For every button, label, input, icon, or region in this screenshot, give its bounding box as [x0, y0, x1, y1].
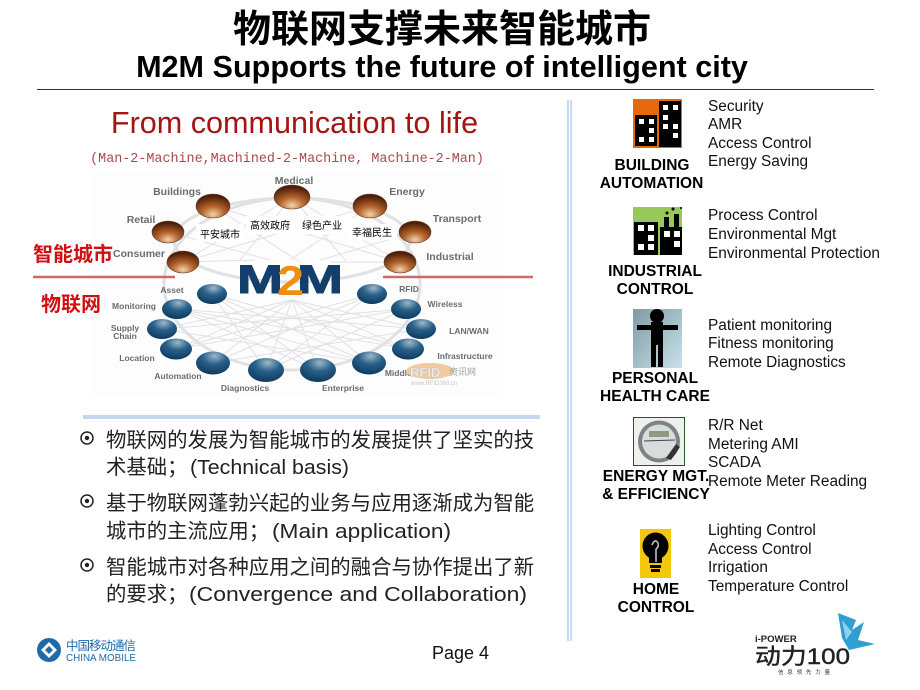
divider: smart city and IoT layers [33, 276, 533, 278]
bullet list [81, 429, 534, 606]
watermark: www.RFID360.cn [410, 381, 457, 387]
M2M logo: M [297, 258, 343, 302]
icon: person [633, 309, 682, 368]
panel: personal health care [600, 309, 846, 405]
bullet 1 [81, 429, 534, 479]
label: internet of things: 物联网 [41, 293, 101, 316]
panel: energy management and efficiency [602, 417, 867, 503]
bullet 1: 物联网的发展为智能城市的发展提供了坚实的技 [106, 429, 534, 452]
icon: light bulb [640, 529, 671, 578]
bullet 2: 城市的主流应用； [106, 521, 269, 543]
panel: building automation: Security [708, 98, 764, 115]
panel: home control: Access Control [708, 541, 812, 558]
panel: home control: Irrigation [708, 559, 768, 576]
panel: energy management and efficiency: & EFFICIENCY [602, 486, 710, 503]
node labels: Retail [127, 214, 155, 226]
panel: building automation [600, 98, 812, 192]
node labels: Industrial [426, 251, 474, 263]
node labels: Middleware [385, 368, 431, 378]
bullet 3: (Convergence and Collaboration) [189, 584, 527, 606]
panel: industrial control: INDUSTRIAL [608, 263, 702, 280]
node labels: Wireless [428, 299, 463, 309]
bullet 3: 的要求； [106, 584, 188, 606]
node labels: Consumer [113, 248, 165, 260]
panel: industrial control: Environmental Mgt [708, 226, 837, 243]
panel: energy management and efficiency: R/R Net [708, 417, 763, 434]
node labels: Buildings [153, 186, 201, 198]
subheading: machine relationships: (Man-2-Machine,Machined-2-Machine, Machine-2-Man) [90, 152, 484, 167]
nodes: smart city applications [152, 185, 431, 273]
bullet 1: (Technical basis) [190, 457, 349, 479]
panel: energy management and efficiency: SCADA [708, 454, 762, 471]
M2M logo: 2 [277, 257, 304, 304]
panel: building automation: Access Control [708, 135, 812, 152]
Chinese overlay labels: 高效政府 [250, 219, 290, 232]
nodes: M2M technologies [147, 284, 436, 382]
panel: home control: Lighting Control [708, 522, 816, 539]
bullet 3 [81, 556, 534, 606]
panel: home control: Temperature Control [708, 578, 848, 595]
panel: personal health care: HEALTH CARE [600, 388, 710, 405]
node labels: Location [119, 353, 155, 363]
panel: home control: HOME [633, 581, 679, 598]
Chinese overlay labels [196, 216, 397, 242]
panel: home control: CONTROL [618, 599, 694, 616]
chart: M2M network diagram [90, 173, 503, 395]
bullet 2: 基于物联网蓬勃兴起的业务与应用逐渐成为智能 [106, 492, 534, 515]
node labels: Diagnostics [221, 383, 269, 393]
M2M logo: M [237, 258, 283, 302]
panel: building automation: Energy Saving [708, 153, 808, 170]
icon: electric meter [634, 418, 684, 466]
logo: i-POWER 100 [755, 613, 875, 676]
bullet 2 [81, 492, 534, 543]
Chinese overlay labels: 幸福民生 [352, 226, 392, 239]
panel: building automation: AUTOMATION [600, 175, 703, 192]
panel: personal health care: Remote Diagnostics [708, 354, 846, 371]
node labels: Energy [389, 186, 425, 198]
panel: building automation: AMR [708, 116, 742, 133]
node labels: Automation [154, 371, 202, 381]
logo: i-POWER 100: i-POWER [755, 634, 797, 645]
logo: China Mobile [37, 638, 136, 664]
node labels: Chain [113, 331, 137, 341]
node labels: Medical [275, 175, 313, 187]
bullet 1: 术基础； [106, 457, 188, 479]
panel: industrial control: Environmental Protection [708, 245, 880, 262]
M2M logo [237, 257, 343, 304]
page number: Page 4 [432, 643, 489, 663]
panel: home control [618, 522, 848, 616]
Chinese overlay labels: 平安城市 [200, 228, 240, 241]
logo: i-POWER 100: 动力100 [755, 644, 850, 669]
panel: personal health care: Patient monitoring [708, 317, 832, 334]
node labels: Infrastructure [437, 351, 493, 361]
watermark: 资讯网 [449, 367, 476, 377]
node labels: Enterprise [322, 383, 364, 393]
node labels: RFID [399, 284, 419, 294]
node labels [111, 175, 493, 393]
watermark: RFID [410, 365, 440, 380]
icon: factory [633, 207, 682, 255]
title: M2M Supports the future of intelligent city [136, 50, 748, 84]
Chinese overlay labels: 绿色产业 [302, 219, 342, 232]
label: smart city: 智能城市 [33, 242, 113, 266]
panel: energy management and efficiency: Metering AMI [708, 436, 799, 453]
panel: industrial control: Process Control [708, 207, 818, 224]
panel: energy management and efficiency: ENERGY MGT. [603, 468, 709, 485]
node labels: Supply [111, 323, 139, 333]
logo: China Mobile: 中国移动通信 [66, 638, 136, 653]
node labels: Asset [160, 285, 184, 295]
panel: energy management and efficiency: Remote Meter Reading [708, 473, 867, 490]
node labels: Monitoring [112, 301, 156, 311]
node labels: LAN/WAN [449, 326, 489, 336]
logo: i-POWER 100: 信息领先力量 [778, 668, 830, 676]
bullet 2: (Main application) [272, 521, 451, 543]
icon: buildings [633, 99, 682, 148]
title: 物联网支撑未来智能城市 [233, 9, 651, 51]
panel: building automation: BUILDING [615, 157, 689, 174]
title [136, 9, 748, 84]
panel: industrial control [608, 207, 880, 298]
watermark [406, 363, 476, 387]
panel: industrial control: CONTROL [617, 281, 693, 298]
node labels: Transport [433, 213, 482, 225]
logo: China Mobile: CHINA MOBILE [66, 652, 136, 664]
heading: from communication to life: From communication to life [111, 106, 478, 140]
panel: personal health care: Fitness monitoring [708, 335, 834, 352]
bullet 3: 智能城市对各种应用之间的融合与协作提出了新 [106, 556, 534, 579]
panel: personal health care: PERSONAL [612, 370, 698, 387]
